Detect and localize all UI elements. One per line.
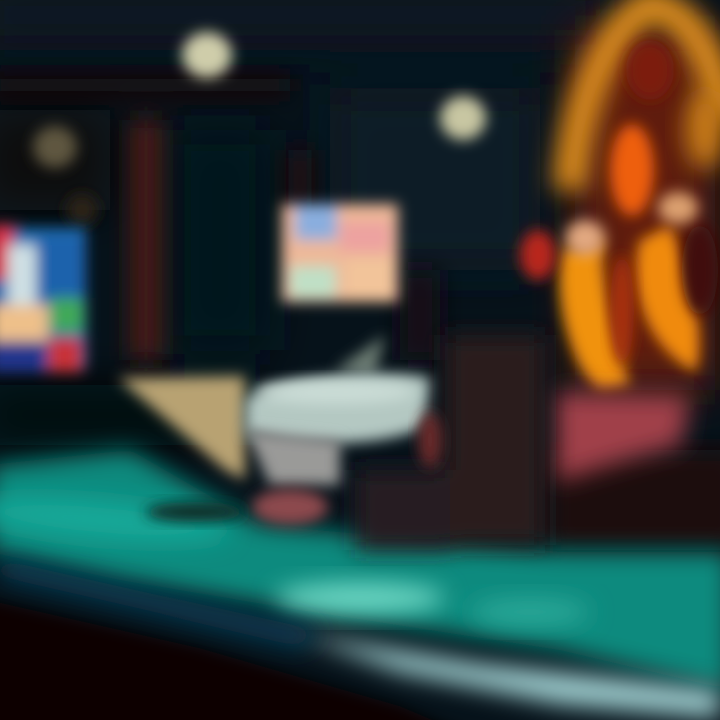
beige triangle <box>118 376 245 480</box>
teal table <box>0 450 720 718</box>
ceiling lights <box>33 32 486 226</box>
red glow beside bowl <box>418 412 442 468</box>
wall shading <box>0 0 600 445</box>
pink pedestal <box>555 392 690 482</box>
pink object under bowl <box>252 489 328 525</box>
dark base under figure <box>550 450 720 550</box>
dark red beam and pillars <box>0 76 440 360</box>
chip stacks <box>355 335 545 550</box>
dark shadow on table <box>145 502 245 522</box>
white bowl <box>245 335 430 485</box>
centre screen <box>282 204 398 302</box>
left screen <box>0 225 86 372</box>
orange figure <box>520 5 720 390</box>
bottom dark edge <box>0 598 480 720</box>
